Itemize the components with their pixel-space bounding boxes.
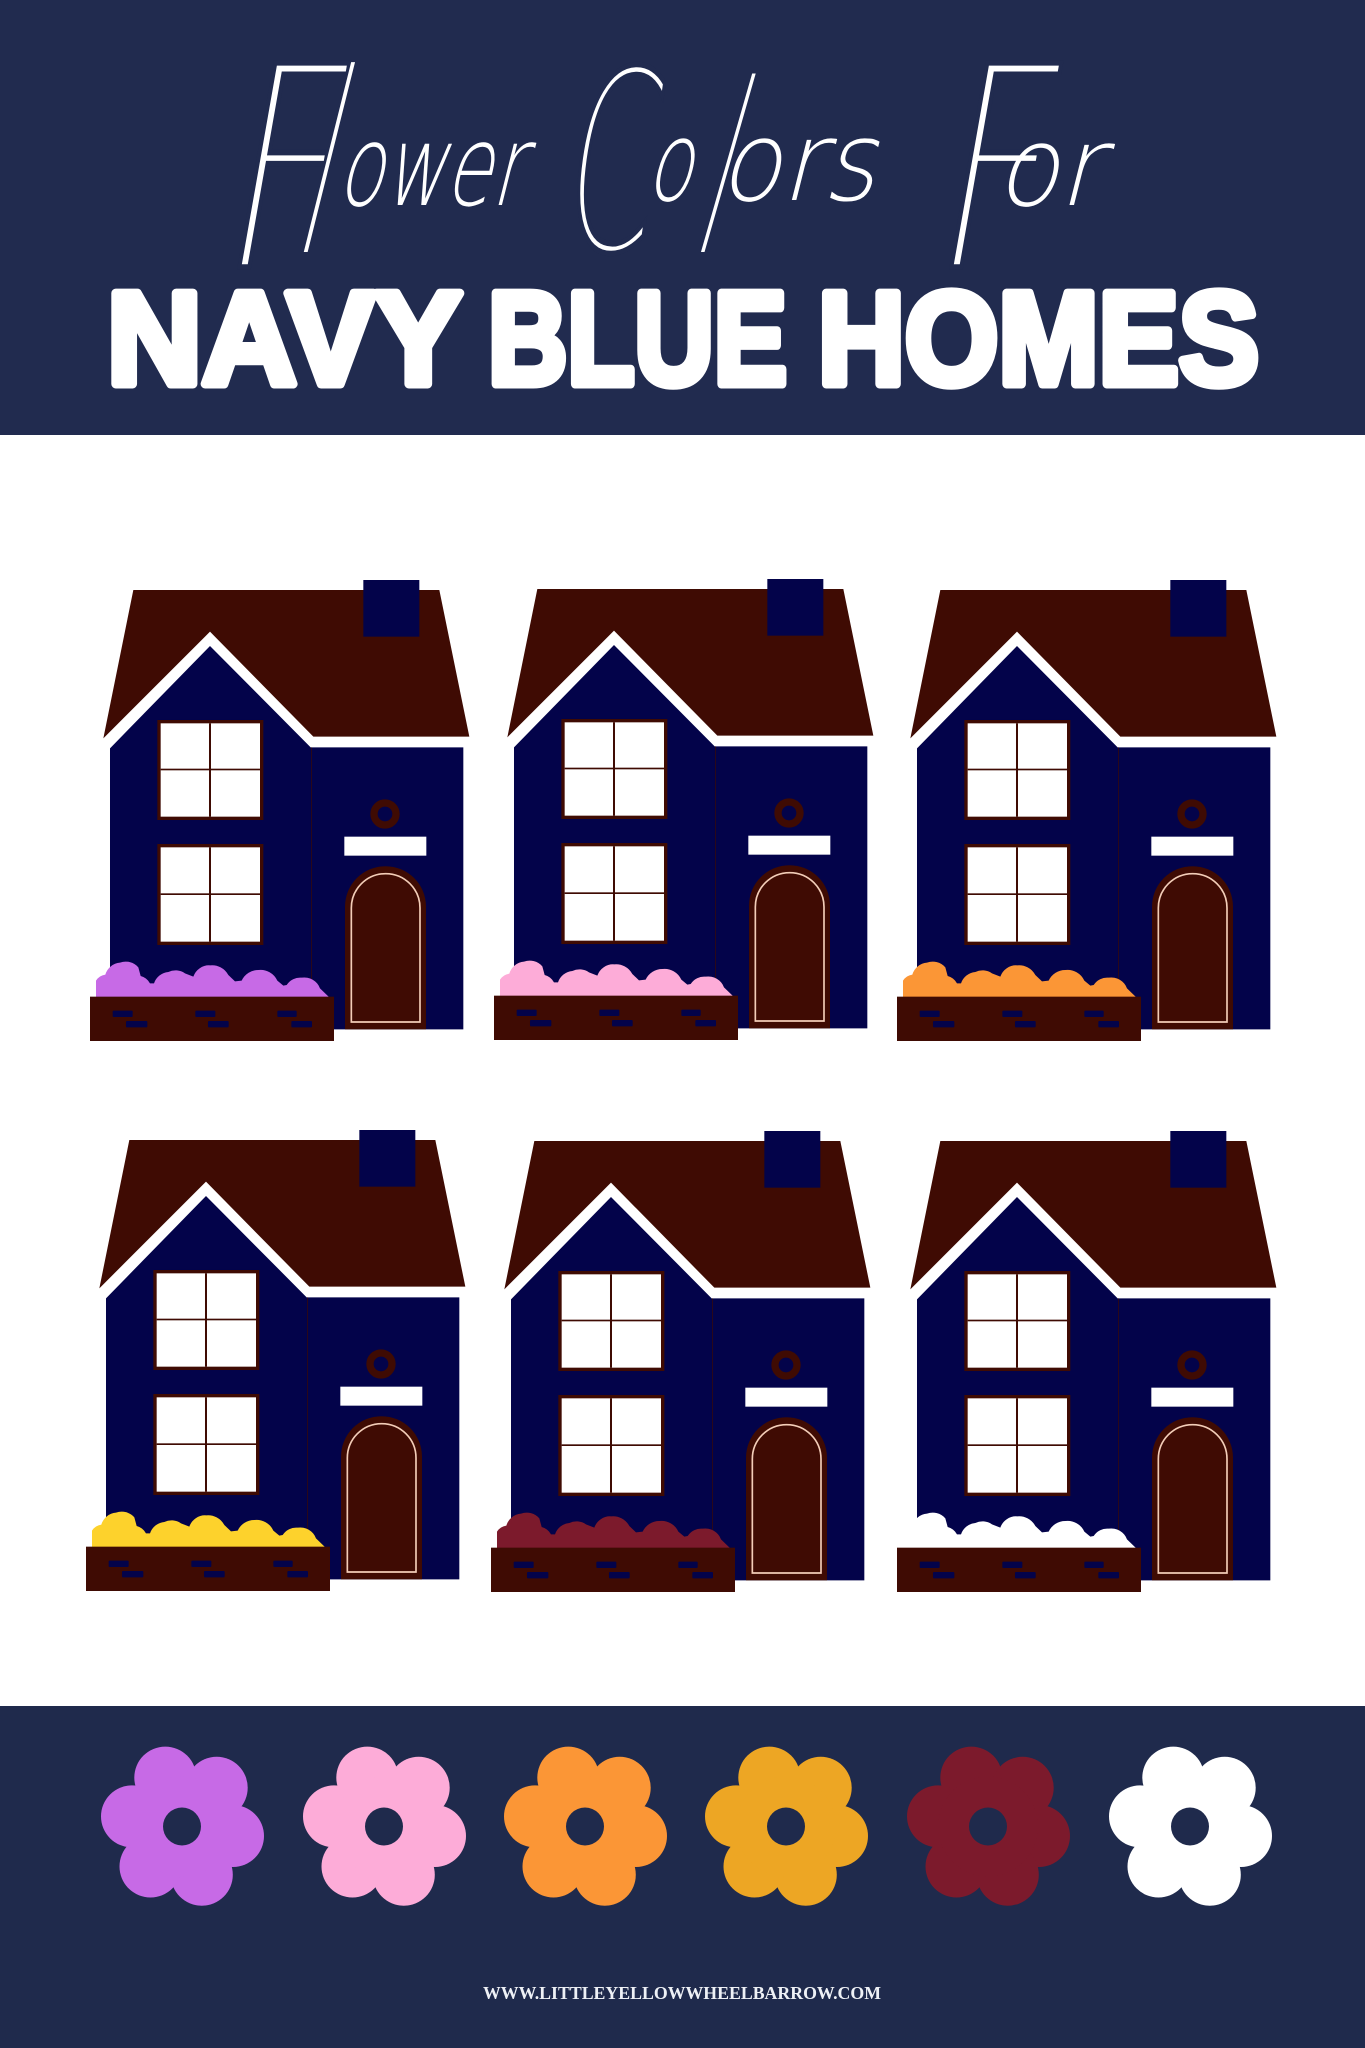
icon: purple flower bbox=[101, 1747, 264, 1906]
title: script line: or bbox=[988, 104, 1125, 232]
icon: pink flower bbox=[303, 1747, 466, 1906]
icon: maroon flower bbox=[907, 1747, 1070, 1906]
title: bold line: HOMES bbox=[818, 265, 1259, 412]
title: bold line: NAVY bbox=[107, 265, 462, 412]
icon: orange flower bbox=[504, 1747, 667, 1906]
house: pink flowers bbox=[494, 579, 873, 1040]
house: yellow flowers bbox=[86, 1130, 465, 1591]
icon: golden flower bbox=[705, 1747, 868, 1906]
house: purple flowers bbox=[90, 580, 469, 1041]
title: script line: l bbox=[279, 20, 376, 311]
title: script line: ower bbox=[329, 101, 547, 232]
title: script line: ors bbox=[711, 99, 900, 227]
title: bold line: BLUE bbox=[488, 265, 787, 412]
title: script line: l bbox=[676, 33, 777, 308]
house: white flowers bbox=[897, 1131, 1276, 1592]
title: script line: C bbox=[550, 19, 680, 310]
footer band bbox=[0, 1706, 1365, 2048]
title: script line bbox=[203, 7, 1125, 333]
title: script line: o bbox=[638, 99, 716, 227]
header band bbox=[0, 0, 1365, 435]
title: bold line bbox=[107, 265, 1259, 412]
icon: white flower bbox=[1109, 1747, 1272, 1906]
website url: WWW.LITTLEYELLOWWHEELBARROW.COM bbox=[483, 1983, 881, 2003]
title: script line: F bbox=[915, 7, 1088, 333]
house: orange flowers bbox=[897, 580, 1276, 1041]
title: script line: F bbox=[203, 7, 376, 333]
house: maroon flowers bbox=[491, 1131, 870, 1592]
